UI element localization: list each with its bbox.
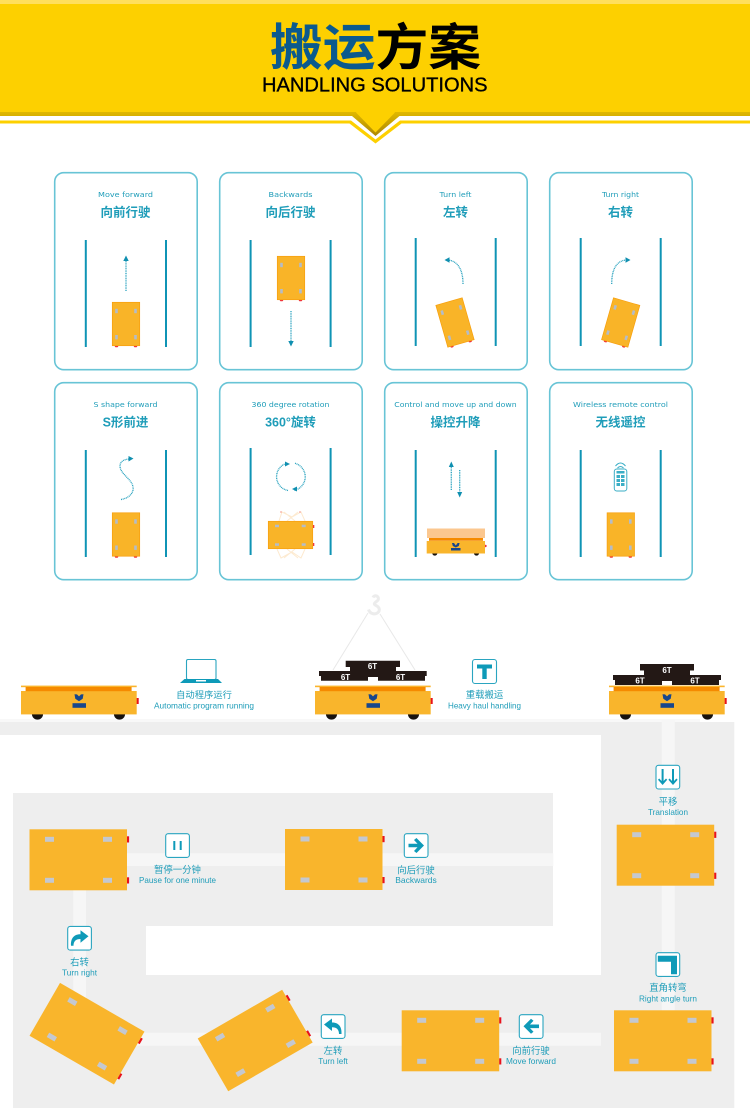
loads 6T: 6T [635, 676, 645, 686]
icon: arrow left [519, 1015, 543, 1038]
loads 6T: 6T [368, 662, 377, 671]
vehicle: right angle [614, 1010, 714, 1071]
panel: s shape forward [55, 383, 197, 580]
panel: 360 degree rotation [220, 383, 362, 580]
panel: turn right: 右转 [608, 204, 633, 219]
panel: move forward: 向前行驶 [100, 204, 151, 219]
panel: s shape forward: S shape forward [94, 401, 158, 409]
loads 6T [613, 664, 721, 686]
icon: arrow right [404, 834, 428, 857]
panel: control up and down: 操控升降 [430, 414, 481, 429]
vehicle: turning left [198, 989, 314, 1091]
loads 6T: 6T [396, 673, 405, 682]
label: turn left: 左转 [324, 1045, 342, 1056]
label: heavy haul: 重载搬运 [466, 689, 504, 700]
label: move forward [506, 1045, 556, 1066]
loads 6T: 6T [662, 666, 672, 675]
label: right angle turn: 直角转弯 [649, 982, 687, 993]
title english: HANDLING SOLUTIONS [262, 74, 488, 96]
panel: move forward [55, 173, 197, 370]
arrows: up and down [449, 462, 462, 498]
loads 6T [319, 661, 427, 682]
label: turn right: 右转 [70, 956, 89, 967]
vehicle [601, 298, 640, 349]
crane sling and hook [333, 596, 415, 670]
title chinese: 搬运方案 [270, 20, 481, 76]
vehicle: pause [30, 829, 129, 890]
arrow: curve left [444, 257, 463, 284]
icon: turn left [321, 1015, 345, 1038]
vehicle [607, 513, 634, 558]
label: move forward: 向前行驶 [512, 1045, 550, 1056]
panel: wireless remote control: 无线遥控 [595, 414, 646, 429]
label: right angle turn: Right angle turn [639, 994, 697, 1004]
panel: backwards: 向后行驶 [265, 204, 316, 219]
arrow: up [123, 256, 129, 291]
icon: rotation arrows [277, 462, 305, 492]
vehicle [277, 256, 305, 301]
label: translation [648, 796, 688, 817]
label: pause: Pause for one minute [139, 875, 216, 885]
panel: control up and down: Control and move up and down [394, 401, 517, 409]
panel: move forward: Move forward [98, 191, 153, 199]
label: move forward: Move forward [506, 1056, 556, 1066]
label: automatic program [154, 689, 254, 710]
panel: control up and down [385, 383, 527, 580]
loads 6T: 6T [690, 676, 700, 686]
label: turn left [318, 1045, 348, 1066]
panel: turn right: Turn right [601, 191, 639, 199]
header banner [0, 0, 750, 144]
icon: right angle turn [656, 953, 680, 976]
arrow: curve right [612, 257, 630, 284]
label: turn right [62, 956, 98, 978]
label: turn right: Turn right [62, 968, 98, 978]
panel: turn left: Turn left [438, 191, 472, 199]
cart: crane loaded [315, 661, 433, 720]
vehicle [436, 298, 475, 349]
cart: automatic [21, 686, 139, 720]
label: turn left: Turn left [318, 1056, 348, 1066]
lifting cart [427, 528, 487, 556]
label: backwards: 向后行驶 [397, 864, 435, 875]
icon: remote [614, 463, 627, 491]
cart: loaded [609, 664, 727, 720]
rotation ghost [277, 511, 305, 558]
vehicle [268, 521, 314, 549]
icon: pause [166, 834, 189, 857]
panel: wireless remote control [550, 383, 692, 580]
label: pause: 暂停一分钟 [154, 864, 201, 875]
arrow: down [288, 311, 294, 346]
panel: backwards: Backwards [268, 191, 313, 199]
vehicle: translation [617, 825, 716, 886]
vehicle [112, 513, 140, 558]
panel: turn left: 左转 [443, 204, 468, 219]
icon: translation [656, 765, 680, 789]
panel: 360 degree rotation: 360°旋转 [265, 414, 316, 429]
arrow: s curve [120, 456, 134, 500]
icon: T heavy haul [472, 660, 496, 684]
label: translation: 平移 [659, 796, 677, 807]
vehicle: backwards [285, 829, 385, 890]
panel: turn left [385, 173, 527, 370]
vehicle: forward [402, 1010, 501, 1071]
label: heavy haul: Heavy haul handling [448, 700, 521, 710]
icon: laptop [180, 660, 222, 683]
vehicle: turning right [30, 983, 146, 1086]
label: heavy haul [448, 689, 521, 710]
vehicle [112, 302, 140, 347]
loads 6T: 6T [341, 673, 350, 682]
panel: wireless remote control: Wireless remote control [573, 401, 668, 409]
label: right angle turn [639, 982, 697, 1004]
panel: turn right [550, 173, 692, 370]
panel: backwards [220, 173, 362, 370]
panel: s shape forward: S形前进 [103, 414, 149, 429]
icon: turn right [68, 926, 91, 950]
panel: 360 degree rotation: 360 degree rotation [252, 401, 330, 409]
label: backwards [395, 864, 437, 885]
floor route [0, 719, 734, 1108]
label: pause [139, 864, 216, 885]
label: automatic program: Automatic program running [154, 700, 254, 710]
label: automatic program: 自动程序运行 [176, 689, 232, 700]
label: translation: Translation [648, 807, 688, 817]
label: backwards: Backwards [395, 875, 437, 885]
